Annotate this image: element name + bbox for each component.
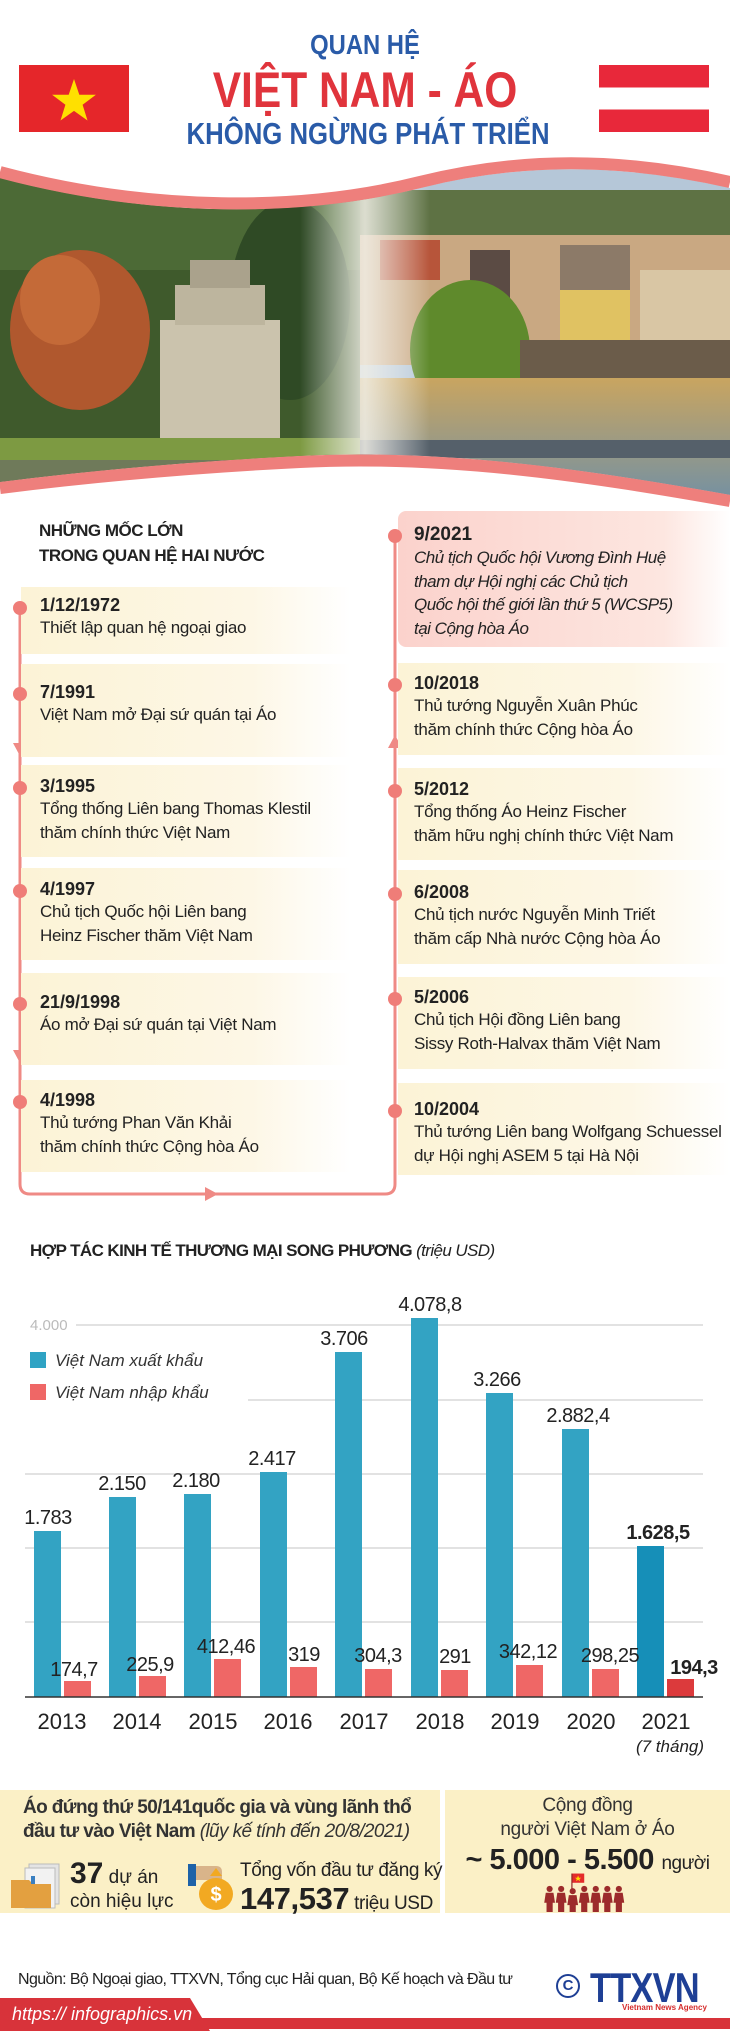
bars [34, 1318, 664, 1697]
heading: milestones: NHỮNG MỐC LỚN [39, 521, 183, 540]
value labels: 194,3 [670, 1657, 718, 1679]
panel: investment [0, 1790, 440, 1913]
item 10/2018 [398, 663, 730, 755]
year labels [38, 1709, 704, 1756]
heading: milestones: TRONG QUAN HỆ HAI NƯỚC [39, 546, 264, 565]
bar chart [24, 1294, 718, 1756]
title: KHÔNG NGỪNG PHÁT TRIỂN [187, 116, 550, 151]
panel: Vietnamese community: người Việt Nam ở Áo [500, 1819, 675, 1840]
investment text: đầu tư vào Việt Nam (lũy kế tính đến 20/8/2021) [23, 1821, 410, 1842]
item 1/12/1972 [21, 587, 351, 654]
year labels: 2020 [567, 1709, 615, 1734]
stat: community size: ~ 5.000 - 5.500 người [465, 1844, 710, 1876]
icon: documents [11, 1864, 60, 1908]
item 1/12/1972: Thiết lập quan hệ ngoại giao [40, 618, 246, 637]
value labels: 3.266 [473, 1369, 521, 1391]
year labels: 2013 [38, 1709, 86, 1734]
timeline: left column [13, 587, 318, 1172]
item 10/2018: thăm chính thức Cộng hòa Áo [414, 720, 633, 738]
logo: TTXVN: C [563, 1977, 573, 1994]
icon: money bag [188, 1864, 233, 1910]
chart title: HỢP TÁC KINH TẾ THƯƠNG MẠI SONG PHƯƠNG (triệu USD) [30, 1241, 495, 1260]
timeline line [13, 542, 398, 1201]
value labels: 1.783 [24, 1507, 72, 1529]
stat: 37 projects: còn hiệu lực [70, 1891, 174, 1912]
flag: Austria [599, 65, 709, 132]
title [187, 29, 550, 151]
item 7/1991 [21, 664, 351, 757]
flag: Vietnam [19, 65, 129, 132]
item 4/1998: Thủ tướng Phan Văn Khải [40, 1113, 231, 1132]
item 3/1995 [21, 765, 351, 857]
year labels: 2017 [340, 1709, 388, 1734]
item 4/1997: Heinz Fischer thăm Việt Nam [40, 926, 253, 944]
item 3/1995: Tổng thống Liên bang Thomas Klestil [40, 799, 311, 818]
item 9/2021 highlighted: tham dự Hội nghị các Chủ tịch [414, 572, 628, 590]
value labels: 3.706 [320, 1328, 368, 1350]
item 3/1995: thăm chính thức Việt Nam [40, 822, 230, 842]
item 10/2004: 10/2004 [414, 1099, 479, 1119]
stat: total investment: Tổng vốn đầu tư đăng ký [240, 1860, 442, 1881]
photo banner: Hanoi and Austria [0, 157, 730, 507]
item 10/2004: Thủ tướng Liên bang Wolfgang Schuessel [414, 1122, 722, 1141]
item 21/9/1998 [21, 973, 351, 1065]
item 4/1998: thăm chính thức Cộng hòa Áo [40, 1136, 259, 1156]
value labels: 2.150 [98, 1473, 146, 1495]
item 9/2021 highlighted: Chủ tịch Quốc hội Vương Đình Huệ [414, 548, 666, 567]
value labels: 225,9 [126, 1654, 174, 1676]
year labels: 2015 [189, 1709, 237, 1734]
stat: 37 projects: 37 dự án [70, 1857, 158, 1890]
footer bar [0, 1998, 730, 2031]
heading: milestones [39, 521, 264, 565]
item 4/1998: 4/1998 [40, 1090, 95, 1110]
item 21/9/1998: Áo mở Đại sứ quán tại Việt Nam [40, 1015, 276, 1034]
year labels: 2019 [491, 1709, 539, 1734]
value labels: 2.180 [172, 1470, 220, 1492]
item 3/1995: 3/1995 [40, 776, 95, 796]
logo: TTXVN: TTXVN [590, 1964, 699, 2011]
source: Nguồn: Bộ Ngoại giao, TTXVN, Tổng cục Hải quan, Bộ Kế hoạch và Đầu tư [18, 1971, 512, 1988]
value labels: 342,12 [499, 1641, 557, 1663]
item 5/2012: 5/2012 [414, 779, 469, 799]
value labels: 2.882,4 [546, 1405, 610, 1427]
year labels: 2018 [416, 1709, 464, 1734]
item 4/1997: 4/1997 [40, 879, 95, 899]
legend: Việt Nam nhập khẩu [55, 1383, 209, 1402]
value labels: 319 [288, 1644, 320, 1666]
title: QUAN HỆ [310, 29, 420, 60]
item 4/1998 [21, 1080, 351, 1172]
item 5/2012: Tổng thống Áo Heinz Fischer [414, 802, 626, 821]
item 9/2021 highlighted [398, 511, 730, 647]
year labels: 2021 [642, 1709, 690, 1734]
panel: Vietnamese community: Cộng đồng [542, 1795, 633, 1816]
item 10/2018: 10/2018 [414, 673, 479, 693]
item 10/2004 [398, 1083, 730, 1175]
year labels: 2014 [113, 1709, 161, 1734]
legend [30, 1351, 209, 1402]
item 6/2008: Chủ tịch nước Nguyễn Minh Triết [414, 905, 655, 924]
investment text [23, 1796, 411, 1842]
item 10/2004: dự Hội nghị ASEM 5 tại Hà Nội [414, 1146, 639, 1164]
timeline: right column [388, 511, 722, 1175]
title: VIỆT NAM - ÁO [213, 62, 517, 118]
icon: people with flag [544, 1874, 624, 1912]
value labels: 4.078,8 [398, 1294, 462, 1316]
item 9/2021 highlighted: 9/2021 [414, 524, 472, 545]
item 6/2008: 6/2008 [414, 882, 469, 902]
item 4/1997 [21, 868, 351, 960]
value labels: 291 [439, 1646, 471, 1668]
value labels: 1.628,5 [626, 1522, 690, 1544]
year labels: (7 tháng) [636, 1737, 704, 1756]
item 1/12/1972: 1/12/1972 [40, 595, 120, 615]
stat: 37 projects [70, 1857, 174, 1912]
value labels: 174,7 [50, 1659, 98, 1681]
item 7/1991: 7/1991 [40, 682, 95, 702]
stat: total investment: 147,537 triệu USD [240, 1881, 433, 1916]
item 6/2008: thăm cấp Nhà nước Cộng hòa Áo [414, 928, 660, 948]
website url: https:// infographics.vn [12, 2004, 192, 2024]
item 5/2012 [398, 768, 730, 860]
panel: Vietnamese community [445, 1790, 730, 1913]
item 5/2006 [398, 977, 730, 1069]
value labels [24, 1294, 718, 1681]
bar chart: 4.000 [30, 1317, 68, 1334]
value labels: 412,46 [197, 1636, 255, 1658]
item 21/9/1998: 21/9/1998 [40, 992, 120, 1012]
item 5/2006: Sissy Roth-Halvax thăm Việt Nam [414, 1034, 660, 1052]
investment text: Áo đứng thứ 50/141quốc gia và vùng lãnh thổ [23, 1797, 411, 1818]
value labels: 298,25 [581, 1645, 639, 1667]
item 6/2008 [398, 870, 730, 964]
item 4/1997: Chủ tịch Quốc hội Liên bang [40, 902, 246, 921]
value labels: 2.417 [248, 1448, 296, 1470]
logo: TTXVN: Vietnam News Agency [622, 2003, 707, 2012]
legend: Việt Nam xuất khẩu [55, 1351, 204, 1370]
item 5/2006: 5/2006 [414, 987, 469, 1007]
item 5/2012: thăm hữu nghị chính thức Việt Nam [414, 826, 673, 844]
stat: total investment [240, 1860, 442, 1916]
year labels: 2016 [264, 1709, 312, 1734]
item 5/2006: Chủ tịch Hội đồng Liên bang [414, 1010, 620, 1029]
icon: money bag: $ [210, 1884, 222, 1906]
value labels: 304,3 [354, 1645, 402, 1667]
item 10/2018: Thủ tướng Nguyễn Xuân Phúc [414, 696, 638, 715]
item 7/1991: Việt Nam mở Đại sứ quán tại Áo [40, 705, 276, 724]
item 9/2021 highlighted: tại Cộng hòa Áo [414, 618, 528, 638]
item 9/2021 highlighted: Quốc hội thế giới lần thứ 5 (WCSP5) [414, 595, 673, 614]
